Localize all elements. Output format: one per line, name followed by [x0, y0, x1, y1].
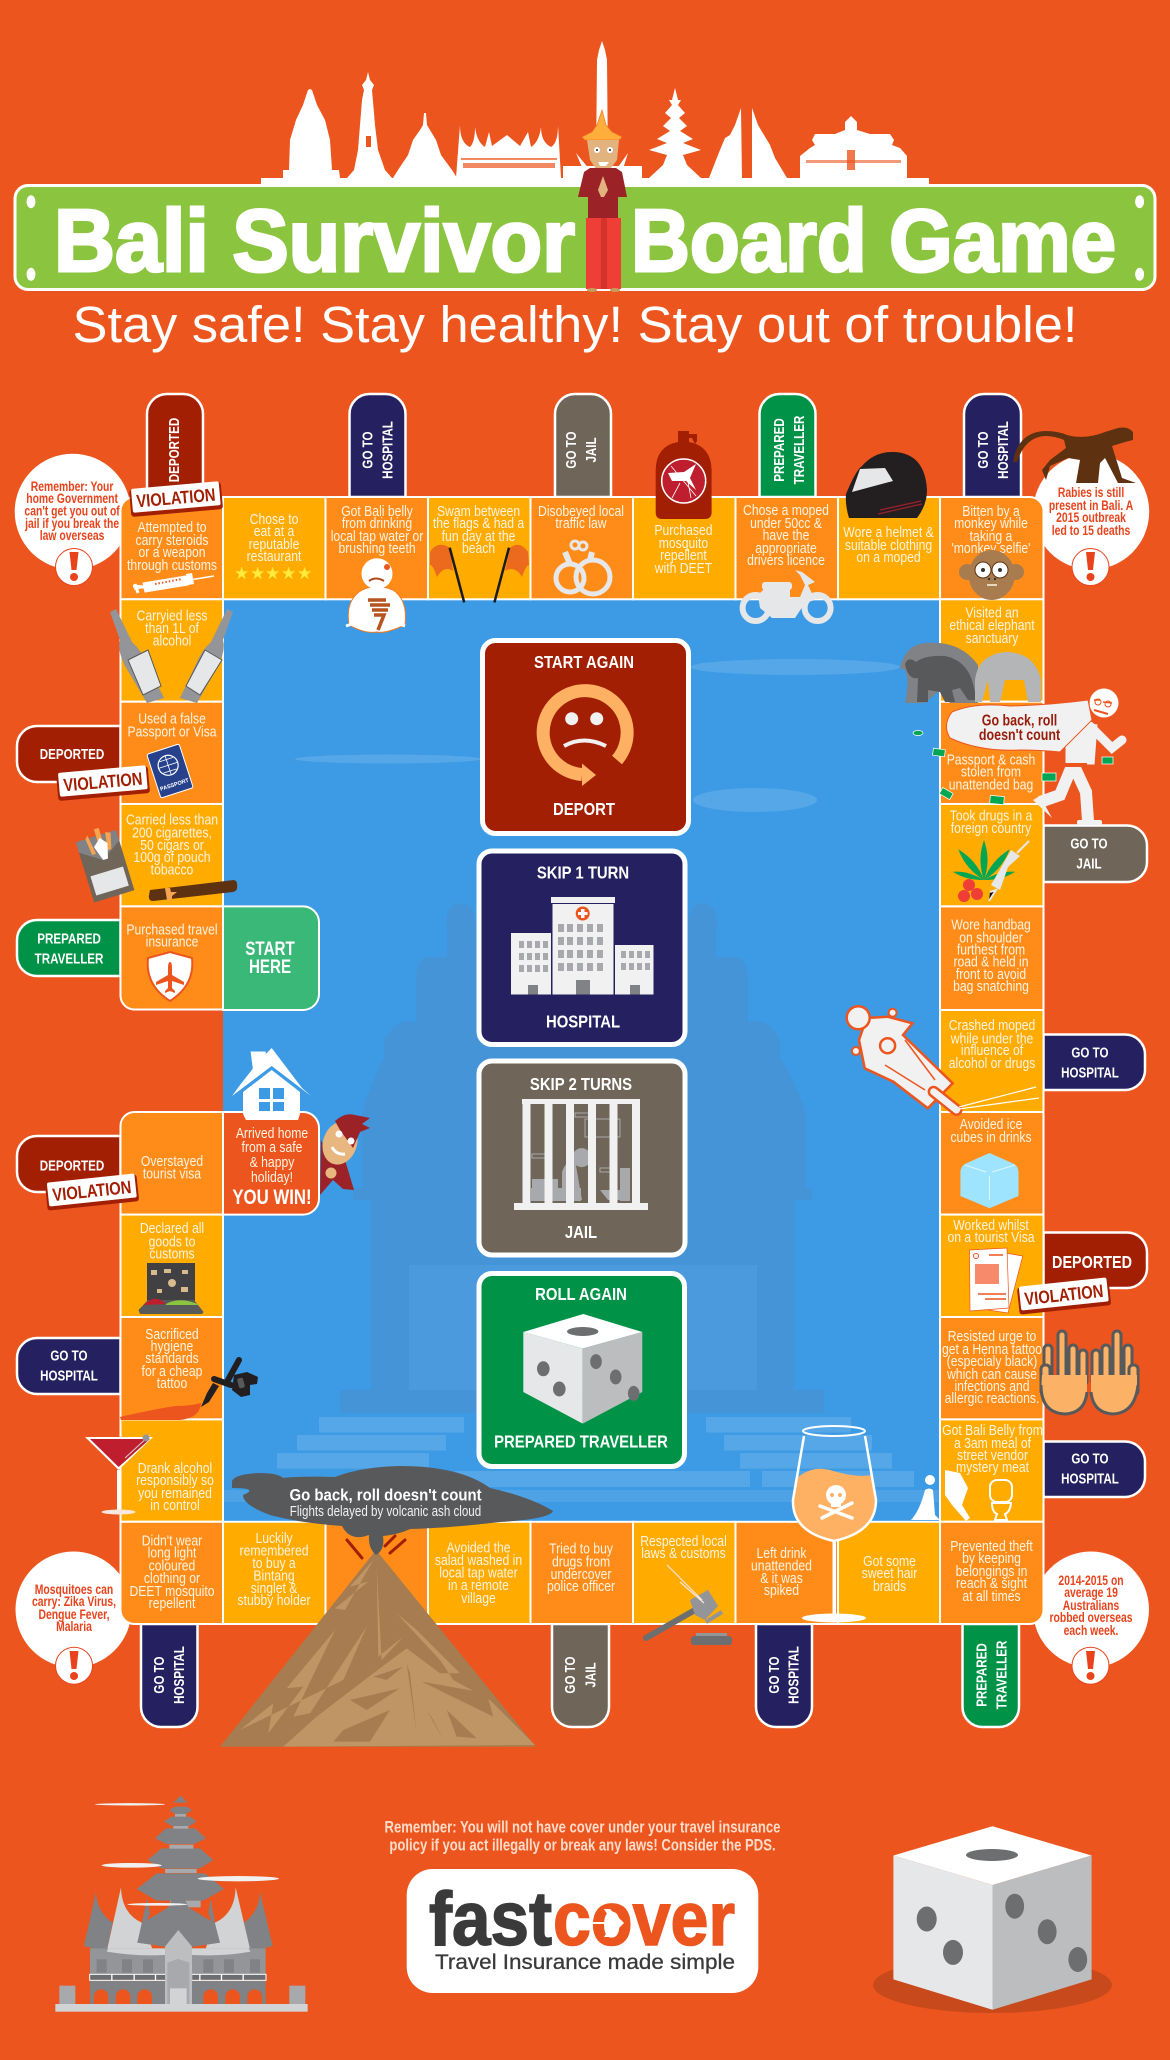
right column cells: Crashed moped [949, 1017, 1035, 1033]
top tabs: TRAVELLER [791, 415, 807, 484]
card: roll again / prepared traveller [479, 1274, 684, 1466]
left column cells: Carried less than [126, 812, 218, 828]
bottom tabs: TRAVELLER [993, 1640, 1010, 1709]
top row cells: Purchased [654, 522, 713, 538]
bottom row cells: Avoided the [446, 1540, 511, 1556]
left column cells: HERE [249, 955, 291, 977]
icon: temple illustration [55, 1796, 308, 2012]
top tabs [147, 394, 1021, 497]
bottom row cells: to buy a [252, 1555, 296, 1571]
callout: robbed: robbed overseas [1049, 1610, 1133, 1625]
icon: house [232, 1048, 311, 1120]
left column cells: Carryied less [137, 608, 208, 624]
footer note: Remember: You will not have cover under your travel insurance [385, 1818, 780, 1837]
right column cells: cubes in drinks [950, 1129, 1032, 1145]
card: skip 2 turns / jail [479, 1061, 685, 1255]
ash cloud [232, 1466, 553, 1555]
left column cells: tobacco [151, 862, 193, 878]
top row cells [120, 497, 1044, 599]
callout: home government: law overseas [40, 528, 105, 543]
icon: monkey silhouette [1013, 428, 1136, 483]
top row cells: taking a [970, 528, 1013, 544]
right column cells: infections and [954, 1378, 1030, 1394]
violation stamp: top: VIOLATION [136, 485, 216, 512]
icon: alcohol bottles [110, 609, 233, 703]
top tabs: HOSPITAL [379, 421, 396, 479]
title banner: Bali Survivor [54, 191, 575, 290]
bottom row cells: singlet & [251, 1580, 297, 1596]
bottom tabs: JAIL [582, 1662, 599, 1688]
ash cloud: Flights delayed by volcanic ash cloud [290, 1503, 481, 1519]
bottom tabs: GO TO [151, 1656, 167, 1694]
icon: five stars [234, 564, 312, 584]
right column cells: alcohol or drugs [949, 1055, 1036, 1071]
right column cells: sanctuary [966, 630, 1019, 646]
blue board centre [223, 599, 940, 1522]
title banner: Board Game [631, 191, 1116, 290]
icon: cigar [149, 880, 237, 901]
left column cells: customs [149, 1246, 195, 1262]
right tabs [1044, 826, 1147, 1497]
top row cells: through customs [127, 557, 217, 573]
bottom row cells: belongings in [956, 1563, 1027, 1579]
left tabs: DEPORTED [40, 746, 104, 762]
callout: rabies: Rabies is still [1058, 485, 1124, 500]
fastcover logo: fast [429, 1877, 552, 1962]
top row cells: Bitten by a [962, 503, 1020, 519]
right column cells: on a tourist Visa [948, 1229, 1035, 1245]
icon: five stars: ★ [281, 564, 296, 584]
fastcover logo: cover [553, 1877, 735, 1962]
violation stamp: right [1017, 1277, 1111, 1315]
icon: volcano [220, 1536, 536, 1747]
top row cells: Chose a moped [743, 502, 829, 518]
icon: sick traveller [911, 1470, 970, 1521]
right column cells: Avoided ice [960, 1116, 1022, 1132]
left tabs: TRAVELLER [35, 950, 104, 967]
right column cells: Passport & cash [947, 752, 1035, 768]
bottom row cells: clothing or [144, 1570, 201, 1586]
top row cells: monkey while [954, 515, 1028, 531]
icon: passport: PASSPORT [160, 778, 190, 793]
right column cells: street vendor [957, 1447, 1028, 1463]
top row cells: mosquito [659, 535, 708, 551]
bottom row cells: Prevented theft [950, 1538, 1033, 1554]
icon: spiked wine glass [792, 1426, 876, 1622]
left column cells: Used a false [138, 711, 206, 727]
card: start again / deport: DEPORT [553, 800, 615, 819]
footer note: policy if you act illegally or break any laws! Consider the PDS. [389, 1836, 776, 1855]
icon: five stars: ★ [265, 564, 280, 584]
card: skip 2 turns / jail: JAIL [565, 1223, 597, 1242]
callout: robbed [1033, 1552, 1149, 1684]
left column cells: Drank alcohol [138, 1460, 212, 1476]
bottom row cells: Got some [863, 1553, 916, 1569]
right column cells: influence of [961, 1042, 1023, 1058]
top row cells: Swam between [437, 503, 520, 519]
left tabs: HOSPITAL [40, 1367, 98, 1384]
left column cells: alcohol [153, 633, 191, 649]
left tabs: PREPARED [37, 930, 101, 947]
bottom row cells: braids [873, 1578, 906, 1594]
bottom row cells: stubby holder [238, 1592, 311, 1608]
icon: elephants [900, 643, 1041, 703]
left column cells: tourist visa [143, 1166, 202, 1182]
top row cells: restaurant [247, 548, 302, 564]
icon: suitcase [138, 1263, 204, 1314]
bottom row cells: Didn't wear [142, 1533, 203, 1549]
icon: big dice [873, 1826, 1112, 2013]
top row cells: repellent [660, 547, 707, 563]
left column cells: from a safe [242, 1139, 302, 1155]
callout: rabies: present in Bali. A [1049, 498, 1134, 513]
fastcover logo: Travel Insurance made simple [435, 1951, 735, 1974]
right column cells: (especialy black) [947, 1353, 1037, 1369]
left column cells: tattoo [157, 1375, 187, 1391]
left column cells: 200 cigarettes, [132, 825, 212, 841]
left column cells [120, 599, 319, 1522]
top row cells: eat at a [254, 523, 295, 539]
bottom row cells: Left drink [756, 1545, 807, 1561]
bottom row cells: by keeping [962, 1550, 1021, 1566]
left column cells: YOU WIN! [232, 1186, 312, 1210]
bottom tabs: GO TO [562, 1656, 578, 1694]
bottom row cells: police officer [547, 1578, 616, 1594]
card: start again / deport [482, 640, 688, 834]
bottom row cells: Respected local [640, 1533, 727, 1549]
top tabs: HOSPITAL [995, 421, 1011, 479]
icon: martini [85, 1434, 153, 1514]
bottom row cells: village [461, 1590, 496, 1606]
callout: mosquitoes: Malaria [56, 1619, 92, 1634]
bottom row cells: remembered [240, 1543, 309, 1559]
icon: monkey face [959, 550, 1024, 600]
callout: rabies [1033, 454, 1149, 586]
left column cells: goods to [149, 1234, 195, 1250]
right tabs: GO TO [1071, 1044, 1109, 1061]
bottom row cells: sweet hair [862, 1565, 918, 1581]
icon: five stars: ★ [297, 564, 312, 584]
icon: work documents [970, 1248, 1023, 1313]
icon: tattoo gun [120, 1360, 258, 1420]
callout: home government [15, 454, 131, 586]
bottom row cells: unattended [751, 1558, 812, 1574]
bottom row cells: DEET mosquito [130, 1583, 214, 1599]
bottom row cells: local tap water [439, 1565, 518, 1581]
right tabs: DEPORTED [1052, 1253, 1132, 1272]
violation stamp: left visa [45, 1173, 139, 1211]
right column cells: get a Henna tattoo [942, 1341, 1042, 1357]
bottom tabs [141, 1624, 1019, 1727]
right column cells: Got Bali Belly from [942, 1422, 1043, 1438]
top tabs: GO TO [975, 431, 991, 469]
bottom row cells: salad washed in [435, 1552, 522, 1568]
bottom tabs: GO TO [766, 1656, 782, 1694]
right column cells: on shoulder [959, 930, 1023, 946]
bottom row cells: in a remote [448, 1577, 509, 1593]
right column cells [940, 599, 1044, 1522]
right column cells: foreign country [951, 820, 1032, 836]
bottom row cells: reach & sight [956, 1575, 1027, 1591]
left column cells: hygiene [151, 1338, 193, 1354]
icon: henna hands [1041, 1331, 1138, 1414]
left column cells: than 1L of [145, 620, 199, 636]
card: skip 1 turn / hospital [479, 851, 685, 1044]
icon: insurance shield [148, 952, 192, 1001]
top row cells: reputable [249, 536, 299, 552]
icon: toilet [990, 1480, 1012, 1520]
right tabs: GO TO [1071, 1450, 1109, 1467]
bottom tabs: HOSPITAL [785, 1646, 802, 1704]
top row cells: Wore a helmet & [843, 524, 934, 540]
bottom row cells: & it was [760, 1570, 803, 1586]
callout: mosquitoes: Dengue Fever, [39, 1607, 109, 1622]
top row cells: the flags & had a [433, 515, 525, 531]
bottom row cells: coloured [149, 1558, 195, 1574]
right tabs: GO TO [1070, 835, 1108, 852]
callout: mosquitoes: Mosquitoes can [35, 1582, 113, 1597]
icon: helmet [846, 452, 927, 518]
right column cells: furthest from [957, 942, 1025, 958]
balinese character [576, 110, 628, 292]
icon: cannabis leaf, pills and syringe [952, 840, 1029, 902]
left tabs: GO TO [50, 1347, 88, 1364]
right column cells: mystery meat [956, 1459, 1029, 1475]
top row cells: from drinking [342, 515, 412, 531]
top row cells: 'monkey selfie' [951, 540, 1031, 556]
callout: home government: Remember: Your [31, 479, 114, 494]
icon: passport [147, 744, 193, 798]
icon: mosquito repellent bottle [656, 431, 712, 519]
icon: gavel [646, 1565, 732, 1645]
icon: crashed moped [847, 1006, 1039, 1110]
card: skip 1 turn / hospital: SKIP 1 TURN [537, 863, 629, 883]
right tabs: HOSPITAL [1061, 1064, 1119, 1081]
bottom tabs: PREPARED [973, 1643, 990, 1707]
right column cells: Worked whilst [953, 1217, 1029, 1233]
left column cells: insurance [146, 934, 198, 950]
left column cells: in control [150, 1497, 200, 1513]
callout: robbed: Australians [1063, 1598, 1120, 1613]
right column cells: allergic reactions. [945, 1390, 1039, 1406]
right column cells: a 3am meal of [954, 1435, 1031, 1451]
top row cells: on a moped [856, 549, 921, 565]
top tabs: PREPARED [771, 418, 787, 482]
right column cells: Resisted urge to [948, 1328, 1036, 1344]
callout: home government: home Government [26, 491, 118, 506]
top row cells: Got Bali belly [341, 503, 413, 519]
top row cells: Chose to [250, 511, 298, 527]
left column cells: for a cheap [142, 1363, 202, 1379]
card: roll again / prepared traveller: PREPARED TRAVELLER [494, 1432, 668, 1452]
left column cells: holiday! [251, 1169, 293, 1185]
callout: rabies: led to 15 deaths [1052, 523, 1131, 538]
top row cells: brushing teeth [338, 540, 416, 556]
icon: five stars: ★ [234, 564, 249, 584]
top row cells: carry steroids [136, 532, 209, 548]
right column cells: Visited an [965, 605, 1019, 621]
card: skip 2 turns / jail: SKIP 2 TURNS [530, 1075, 632, 1094]
icon: thief with bag: Go back, roll [982, 712, 1057, 730]
bottom row cells: at all times [962, 1588, 1021, 1604]
subtitle: Stay safe! Stay healthy! Stay out of trouble! [72, 296, 1078, 353]
left column cells: standards [145, 1350, 199, 1366]
icon: peeking man [317, 1114, 370, 1195]
right tabs: JAIL [1076, 855, 1102, 872]
card: start again / deport: START AGAIN [534, 653, 634, 672]
left tabs [17, 726, 120, 1394]
top row cells: suitable clothing [845, 537, 932, 553]
top row cells: fun day at the [442, 528, 515, 544]
top row cells: Attempted to [138, 519, 207, 535]
callout: robbed: each week. [1064, 1623, 1118, 1638]
ash cloud: Go back, roll doesn't count [289, 1487, 482, 1505]
icon: five stars: ★ [250, 564, 265, 584]
top row cells: traffic law [555, 515, 607, 531]
icon: handcuffs [556, 541, 610, 594]
callout: robbed: 2014-2015 on [1058, 1573, 1124, 1588]
top row cells: under 50cc & [750, 515, 822, 531]
bottom row cells: Luckily [255, 1530, 293, 1546]
left column cells: START [245, 937, 295, 959]
icon: thief with bag [913, 688, 1122, 825]
left column cells: Passport or Visa [128, 724, 217, 740]
callout: home government: can't get you out of [24, 503, 121, 519]
top row cells: Disobeyed local [538, 503, 624, 519]
callout: mosquitoes: carry: Zika Virus, [32, 1594, 116, 1609]
right column cells: unattended bag [949, 777, 1033, 793]
right column cells: which can cause [946, 1366, 1037, 1382]
left column cells: Sacrificed [145, 1326, 199, 1342]
skyline silhouette [261, 41, 929, 186]
left tabs: DEPORTED [40, 1157, 104, 1174]
right column cells: Wore handbag [951, 917, 1031, 933]
top row cells: local tap water or [331, 528, 424, 544]
top tabs: DEPORTED [166, 418, 182, 482]
left column cells: responsibly so [136, 1472, 214, 1488]
icon: ice cube [960, 1153, 1018, 1208]
icon: moped [743, 570, 831, 621]
violation stamp: left passport [56, 765, 150, 801]
bottom row cells: drugs from [552, 1554, 610, 1570]
left column cells: Purchased travel [126, 922, 218, 938]
icon: cigarette pack [74, 823, 134, 902]
card: skip 1 turn / hospital: HOSPITAL [546, 1012, 620, 1032]
top row cells: appropriate [755, 540, 817, 556]
right column cells: front to avoid [956, 966, 1026, 982]
bottom row cells: long light [148, 1545, 197, 1561]
bottom row cells: Tried to buy [549, 1541, 613, 1557]
top row cells: with DEET [654, 560, 712, 576]
violation stamp: top [129, 481, 223, 517]
icon: syringe [133, 573, 214, 593]
bottom row cells: undercover [551, 1566, 612, 1582]
callout: mosquitoes [16, 1552, 132, 1684]
icon: sick person [346, 558, 406, 632]
fastcover logo [407, 1869, 758, 1993]
left column cells: & happy [250, 1154, 295, 1170]
top row cells: drivers licence [747, 552, 825, 568]
right column cells: ethical elephant [949, 617, 1035, 633]
bottom row cells: repellent [149, 1595, 196, 1611]
bottom row cells: spiked [764, 1582, 799, 1598]
top tabs: GO TO [563, 431, 579, 469]
left column cells: 50 cigars or [140, 837, 204, 853]
bottom row cells [120, 1522, 1044, 1624]
top row cells: or a weapon [139, 544, 206, 560]
right column cells: Took drugs in a [950, 808, 1033, 824]
card: roll again / prepared traveller: ROLL AGAIN [535, 1285, 627, 1304]
left column cells: Declared all [140, 1220, 204, 1236]
callout: robbed: average 19 [1064, 1585, 1118, 1600]
callout: home government: jail if you break the [24, 516, 119, 531]
bottom row cells: laws & customs [641, 1545, 726, 1561]
top tabs: JAIL [583, 437, 599, 463]
icon: thief with bag: doesn't count [979, 727, 1060, 744]
right column cells: road & held in [953, 954, 1029, 970]
icon: beach flags [430, 545, 529, 602]
bottom row cells: Bintang [253, 1568, 295, 1584]
bottom tabs: HOSPITAL [171, 1646, 187, 1704]
callout: rabies: 2015 outbreak [1056, 510, 1126, 525]
right tabs: HOSPITAL [1061, 1470, 1119, 1487]
top row cells: have the [763, 527, 809, 543]
title banner [15, 186, 1155, 290]
right column cells: bag snatching [953, 978, 1029, 994]
top tabs: GO TO [359, 431, 376, 469]
left column cells: Arrived home [236, 1125, 308, 1141]
violation stamp: left passport: VIOLATION [63, 769, 143, 796]
top row cells: beach [462, 540, 495, 556]
right column cells: while under the [950, 1031, 1033, 1047]
violation stamp: left visa: VIOLATION [52, 1178, 132, 1205]
left column cells: you remained [138, 1485, 212, 1501]
left column cells: 100g of pouch [133, 849, 211, 865]
right column cells: stolen from [961, 764, 1021, 780]
left column cells: Overstayed [141, 1153, 203, 1169]
violation stamp: right: VIOLATION [1024, 1282, 1104, 1309]
